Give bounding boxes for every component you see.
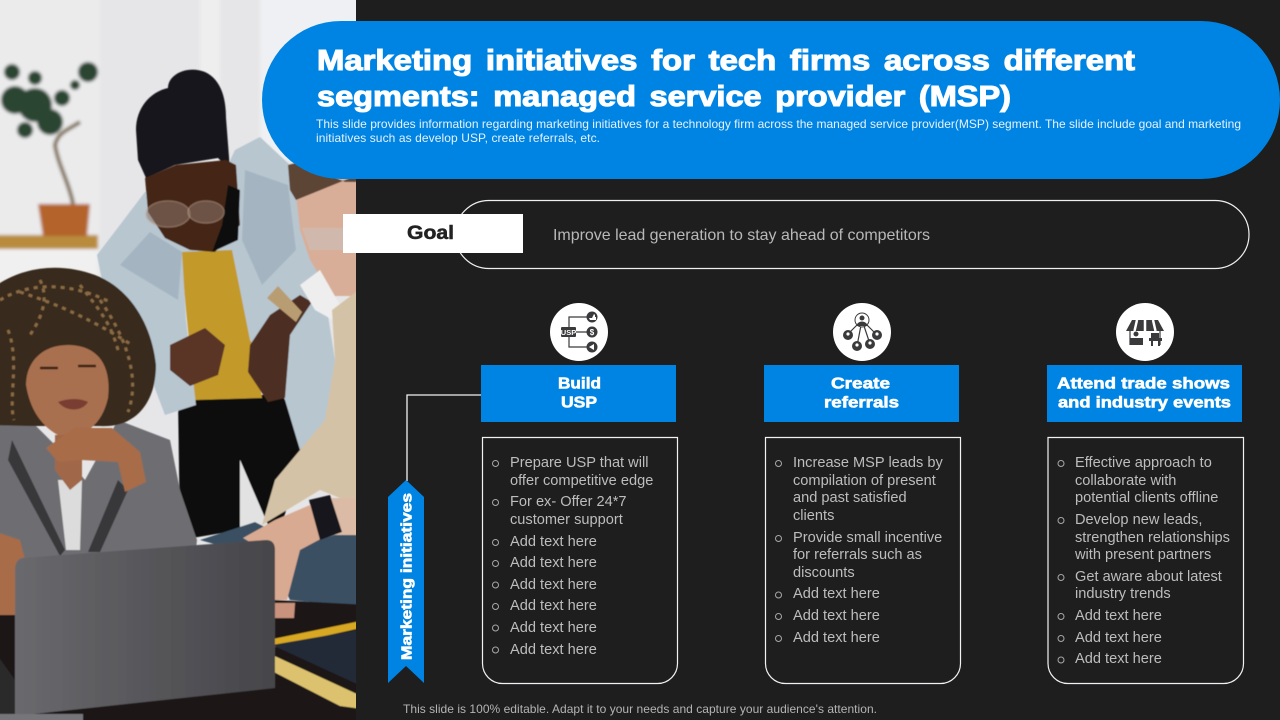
- card: referral bullets: discounts: [793, 565, 855, 581]
- laptop: [15, 540, 275, 716]
- goal label: Goal: [407, 223, 454, 244]
- panel: build USP: [481, 303, 678, 684]
- yellow notebook: [274, 621, 356, 648]
- card: referral bullets: [766, 438, 960, 684]
- heading: create referrals: Create: [831, 376, 890, 392]
- connector arrow line: [407, 395, 481, 481]
- card: trade show bullets: strengthen relationships: [1075, 530, 1230, 546]
- table: [0, 600, 370, 720]
- card: referral bullets: Add text here: [793, 630, 880, 646]
- icon: referral network: [833, 303, 891, 361]
- woman hand: [46, 428, 146, 492]
- ribbon: marketing initiatives: [388, 480, 424, 683]
- card: referral bullets: Add text here: [793, 586, 880, 602]
- card: USP bullets: Add text here: [510, 577, 597, 593]
- card: referral bullets: compilation of present: [793, 473, 936, 489]
- heading: Marketing initiatives for tech firms across different: [317, 45, 1136, 77]
- card: trade show bullets: Get aware about latest: [1075, 569, 1222, 585]
- pants and yellow shirt: [178, 395, 310, 545]
- card: USP bullets: Add text here: [510, 642, 597, 658]
- icon: USP diagram: USP: [561, 328, 576, 337]
- hand and watch: [243, 505, 328, 600]
- card: trade show bullets: collaborate with: [1075, 473, 1176, 489]
- denim jacket: [97, 137, 335, 450]
- card: USP bullets: For ex- Offer 24*7: [510, 494, 627, 510]
- woman face: [26, 345, 109, 437]
- panel: trade shows: [1047, 303, 1244, 684]
- card: referral bullets: Add text here: [793, 608, 880, 624]
- heading: create referrals: referrals: [824, 394, 899, 412]
- card: trade show bullets: Add text here: [1075, 651, 1162, 667]
- heading: build USP: [481, 365, 676, 422]
- card: USP bullets: Prepare USP that will: [510, 455, 648, 471]
- jeans: [200, 522, 356, 606]
- heading: build USP: Build: [558, 376, 601, 392]
- icon: USP diagram: [550, 303, 608, 361]
- title banner: [262, 21, 1280, 179]
- beige jacket: [262, 292, 356, 525]
- card: USP bullets: Add text here: [510, 555, 597, 571]
- card: trade show bullets: [1048, 438, 1244, 684]
- man 1 face: [145, 160, 240, 252]
- hands of man 1: [170, 328, 225, 386]
- photo: team around a laptop: [0, 0, 370, 720]
- card: referral bullets: Provide small incentive: [793, 530, 942, 546]
- subtitle line 2: initiatives such as develop USP, create referrals, etc.: [316, 131, 600, 145]
- man 2 head: [296, 179, 356, 296]
- card: USP bullets: [482, 438, 678, 684]
- card: referral bullets: Increase MSP leads by: [793, 455, 944, 471]
- card: referral bullets: for referrals such as: [793, 547, 922, 563]
- heading: trade shows: and industry events: [1058, 394, 1231, 412]
- card: USP bullets: Add text here: [510, 534, 597, 550]
- card: USP bullets: offer competitive edge: [510, 473, 653, 489]
- heading line 2: segments: managed service provider (MSP): [317, 81, 1011, 113]
- goal text: Improve lead generation to stay ahead of competitors: [553, 227, 930, 244]
- ribbon: marketing initiatives: Marketing initiatives: [398, 493, 416, 660]
- card: trade show bullets: Develop new leads,: [1075, 512, 1202, 528]
- card: USP bullets: Add text here: [510, 598, 597, 614]
- panel: create referrals: [764, 303, 960, 684]
- card: trade show bullets: Effective approach to: [1075, 455, 1212, 471]
- heading: trade shows: Attend trade shows: [1057, 376, 1230, 392]
- woman suit: [0, 418, 197, 558]
- card: referral bullets: clients: [793, 508, 834, 524]
- icon: market stall: [1116, 303, 1174, 361]
- card: trade show bullets: industry trends: [1075, 586, 1171, 602]
- card: USP bullets: customer support: [510, 512, 623, 528]
- heading: create referrals: [764, 365, 959, 422]
- card: trade show bullets: potential clients offline: [1075, 490, 1218, 506]
- woman hair: [0, 268, 156, 426]
- footer note: This slide is 100% editable. Adapt it to your needs and capture your audience's attention.: [403, 702, 877, 716]
- card: trade show bullets: with present partners: [1074, 547, 1211, 563]
- goal row: [343, 200, 1249, 268]
- heading: build USP: USP: [561, 394, 597, 412]
- hair bun: [136, 70, 230, 178]
- card: trade show bullets: Add text here: [1075, 630, 1162, 646]
- card: USP bullets: Add text here: [510, 620, 597, 636]
- subtitle: This slide provides information regarding marketing initiatives for a technology firm across the managed service provider(MSP) segment. The slide include goal and marketing: [316, 117, 1241, 131]
- heading: trade shows: [1047, 365, 1242, 422]
- card: trade show bullets: Add text here: [1075, 608, 1162, 624]
- icon: USP diagram: $: [590, 328, 595, 337]
- card: referral bullets: and past satisfied: [793, 490, 907, 506]
